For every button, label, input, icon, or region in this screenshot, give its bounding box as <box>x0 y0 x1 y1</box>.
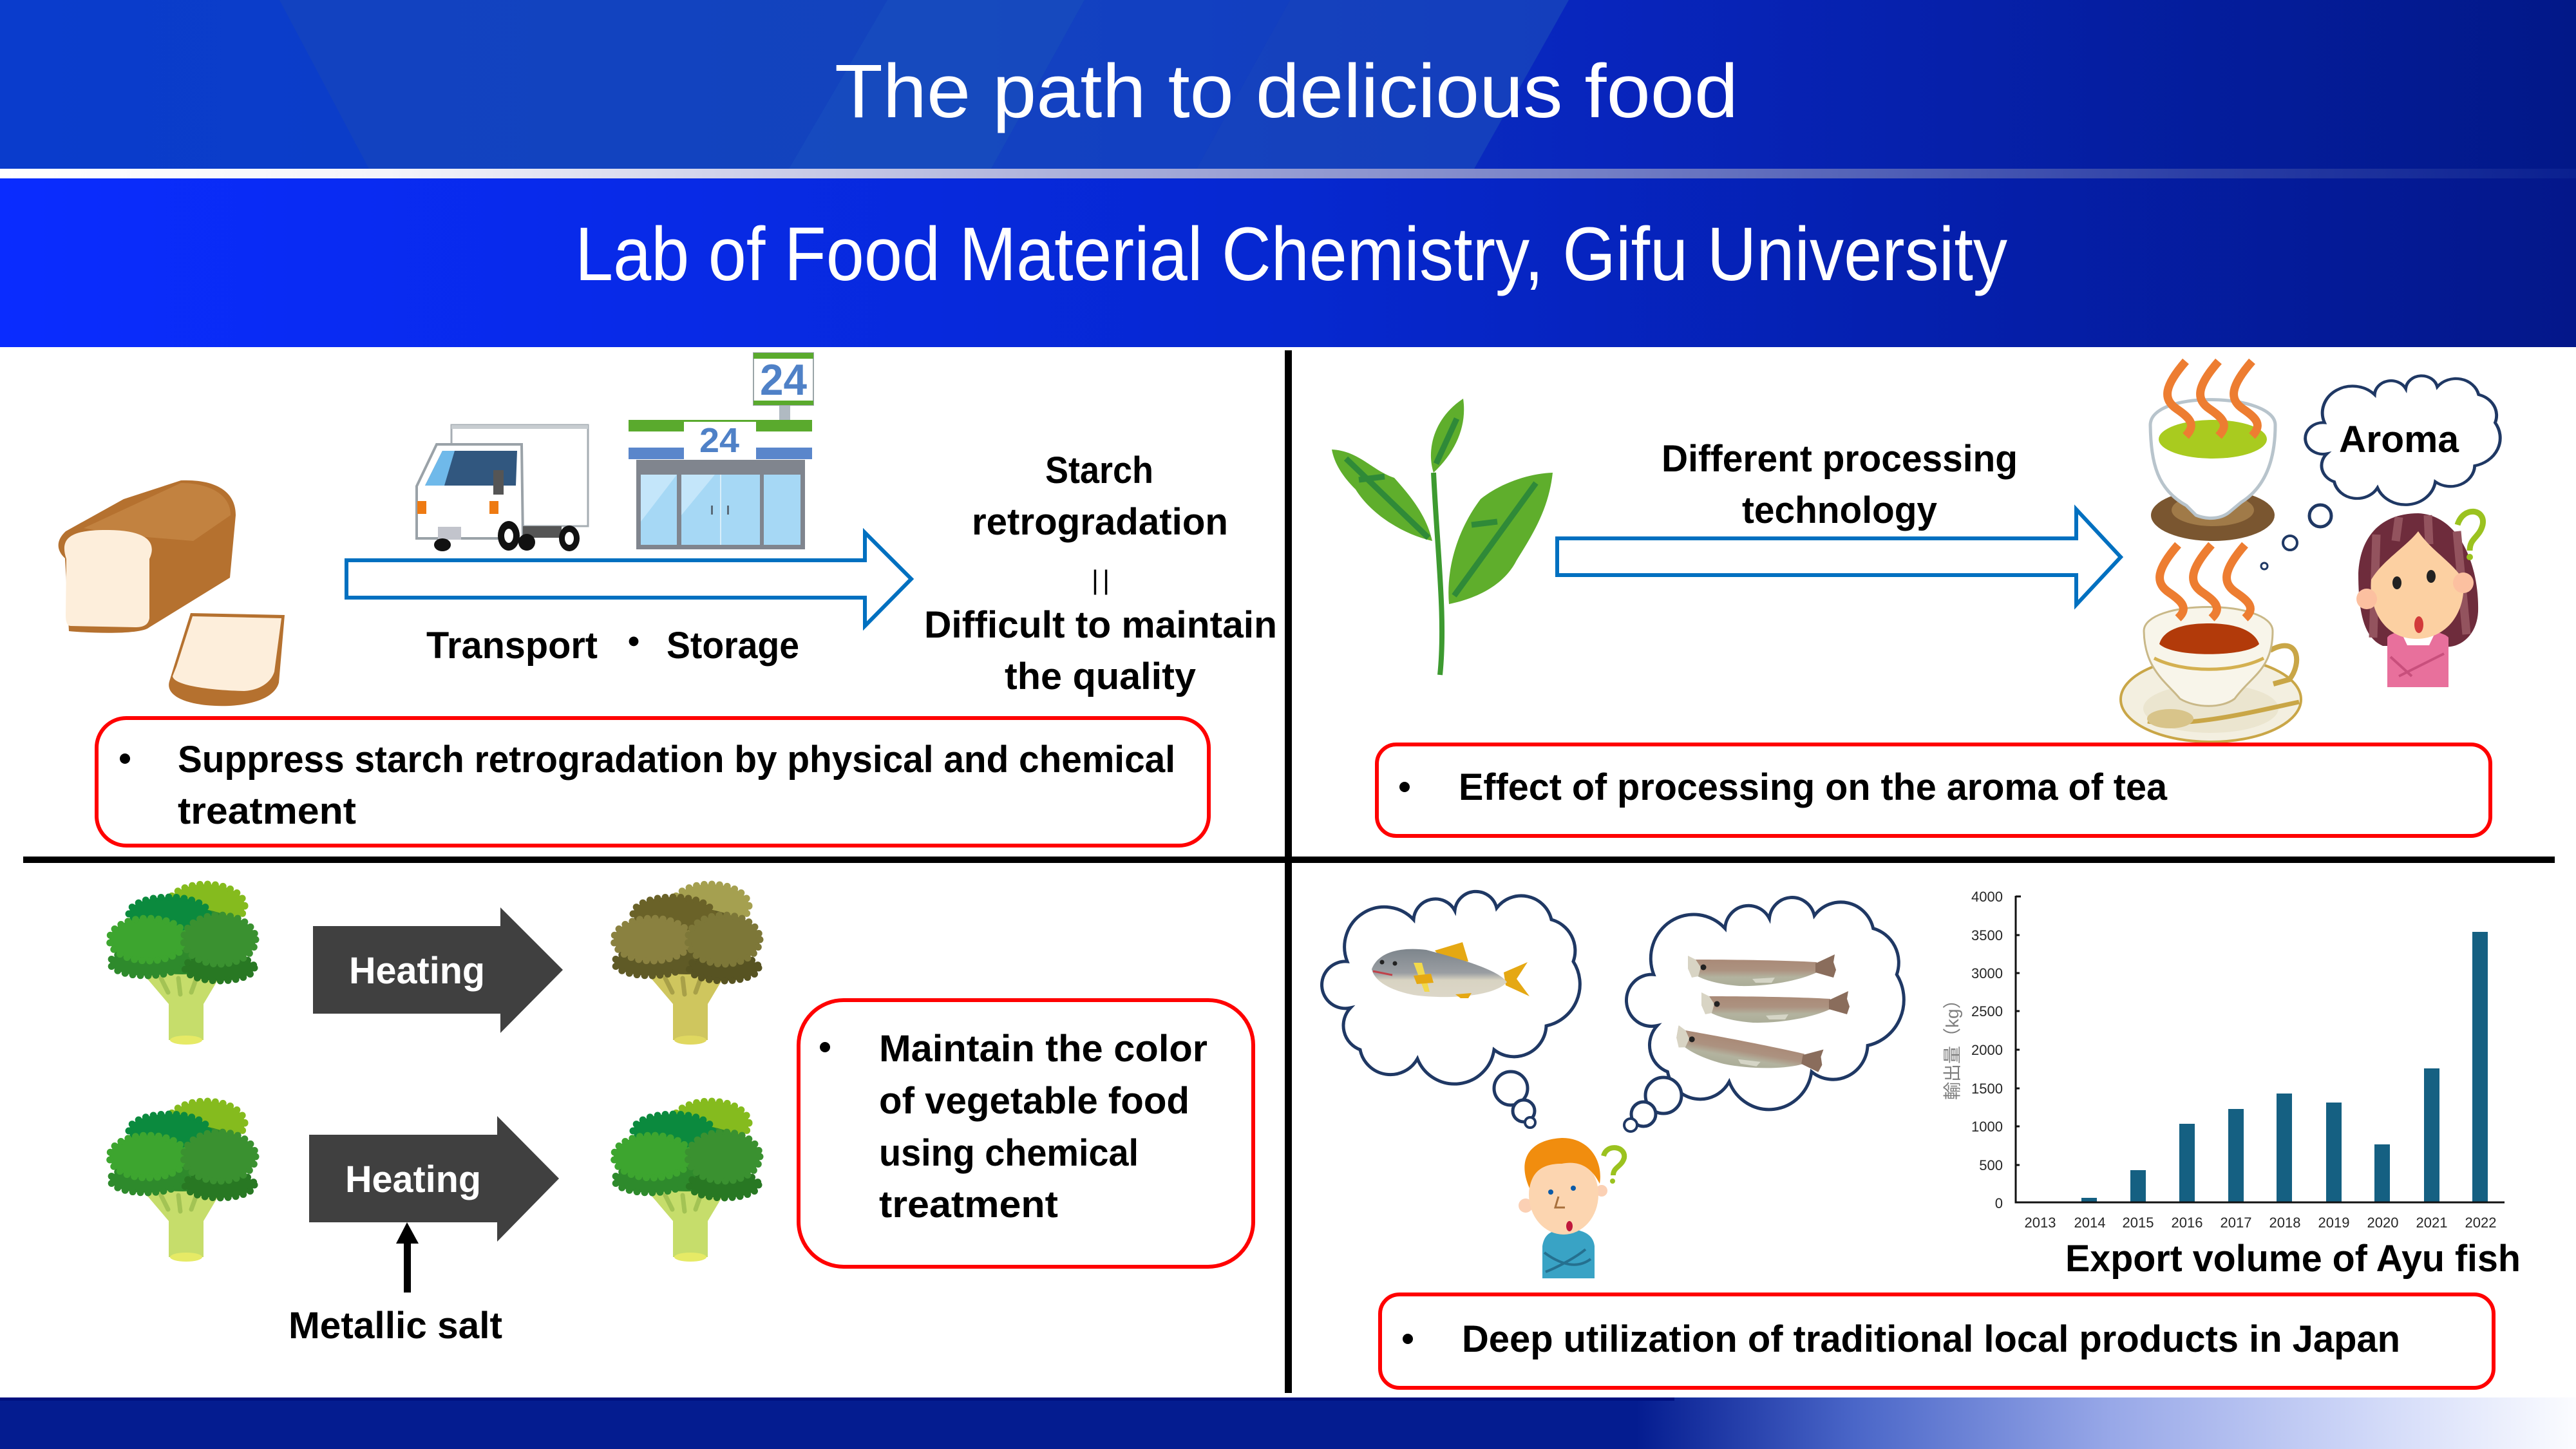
label: transport and storage: Storage <box>667 625 799 667</box>
x axis year labels: 2017 <box>2221 1215 2251 1231</box>
icon: tea leaves <box>1332 399 1553 675</box>
thought cloud: aroma: Aroma <box>2339 419 2459 460</box>
label: metallic salt: Metallic salt <box>289 1305 502 1347</box>
x axis year labels <box>2025 1215 2496 1231</box>
callout: suppress retrogradation <box>97 718 1209 846</box>
thought cloud: live ayu <box>1322 891 1580 1128</box>
x axis year labels: 2015 <box>2123 1215 2154 1231</box>
callout: maintain color <box>799 1000 1253 1267</box>
text: starch retrogradation consequence: Difficult to maintain <box>924 604 1277 646</box>
arrow: processing <box>1557 509 2121 605</box>
label: transport and storage: ・ <box>615 622 652 664</box>
icon: fresh broccoli top left <box>109 884 256 1045</box>
arrow: heating with metallic salt <box>309 1116 559 1242</box>
y axis tick labels: 0 <box>1995 1195 2003 1211</box>
text: starch retrogradation consequence: Starch <box>1045 450 1153 491</box>
thought cloud: aroma <box>2261 376 2500 569</box>
arrow: heating with metallic salt: Heating <box>345 1159 481 1200</box>
text: starch retrogradation consequence <box>924 450 1277 697</box>
label: different processing technology: Different processing <box>1662 438 2018 480</box>
x axis year labels: 2014 <box>2074 1215 2105 1231</box>
x axis year labels: 2016 <box>2172 1215 2202 1231</box>
label: transport and storage <box>426 622 799 667</box>
arrow: transport and storage <box>346 533 911 626</box>
y axis title: 輸出量（kg） <box>1942 990 1962 1100</box>
icon: bread loaf <box>59 480 236 633</box>
bars <box>2081 932 2488 1202</box>
y axis tick labels: 3000 <box>1971 965 2003 981</box>
title: The path to delicious food <box>835 49 1738 134</box>
y axis tick labels: 3500 <box>1971 927 2003 943</box>
icon: fresh broccoli bottom left <box>109 1101 256 1262</box>
panel: tea aroma <box>1332 361 2500 836</box>
label: different processing technology: technology <box>1742 489 1937 531</box>
footer band <box>0 1397 2576 1449</box>
label: different processing technology <box>1662 438 2018 531</box>
icon: browned broccoli <box>614 884 760 1045</box>
axes <box>2016 896 2505 1202</box>
icon: steam over green tea <box>2168 361 2257 436</box>
label: transport and storage: Transport <box>426 625 598 667</box>
panel: vegetable color <box>109 884 1253 1347</box>
white gradient stripe <box>0 169 2576 179</box>
arrow: metallic salt input <box>396 1222 419 1293</box>
icon: thinking girl <box>2356 511 2483 687</box>
thought cloud: grilled ayu <box>1624 898 1904 1132</box>
vertical divider <box>1285 350 1292 1393</box>
callout: effect of processing <box>1377 744 2490 836</box>
icon: green tea cup on coaster <box>2150 400 2275 541</box>
y axis tick labels <box>1971 889 2003 1211</box>
callout: effect of processing: Effect of processing on the aroma of tea <box>1459 766 2168 808</box>
panel: ayu fish <box>1322 889 2521 1388</box>
icon: bread slice <box>169 613 285 706</box>
icon: delivery truck <box>417 425 588 551</box>
icon: three grilled ayu <box>1673 954 1850 1081</box>
callout: suppress retrogradation: treatment <box>178 790 356 832</box>
x axis year labels: 2018 <box>2269 1215 2300 1231</box>
icon: convenience store: 24 <box>699 421 739 460</box>
icon: steam over black tea <box>2160 545 2250 618</box>
text: starch retrogradation consequence: the quality <box>1005 656 1196 697</box>
arrow: heating <box>313 907 563 1033</box>
text: starch retrogradation consequence: retrogradation <box>972 501 1228 543</box>
callout: maintain color: using chemical <box>879 1132 1139 1174</box>
y axis tick labels: 1000 <box>1971 1119 2003 1135</box>
subtitle band background <box>0 178 2576 347</box>
subtitle: Lab of Food Material Chemistry, Gifu University <box>575 212 2007 297</box>
callout: suppress retrogradation: Suppress starch retrogradation by physical and chemical <box>178 739 1175 781</box>
y axis tick labels: 2000 <box>1971 1042 2003 1058</box>
bar chart: export volume of ayu fish <box>1942 889 2505 1231</box>
header band: title background <box>0 0 2576 170</box>
y axis tick labels: 1500 <box>1971 1081 2003 1097</box>
y axis tick labels: 2500 <box>1971 1003 2003 1019</box>
callout: maintain color: of vegetable food <box>879 1080 1189 1122</box>
chart caption: Export volume of Ayu fish <box>2065 1238 2521 1280</box>
callout: maintain color: treatment <box>879 1184 1058 1226</box>
callout: deep utilization: Deep utilization of traditional local products in Japan <box>1462 1318 2400 1360</box>
y axis tick labels: 4000 <box>1971 889 2003 905</box>
icon: thinking boy <box>1519 1138 1624 1278</box>
x axis year labels: 2021 <box>2416 1215 2447 1231</box>
panel: starch retrogradation <box>59 353 1277 846</box>
text: starch retrogradation consequence: || <box>1092 565 1110 595</box>
horizontal divider <box>23 857 2555 863</box>
icon: green broccoli after treatment <box>614 1101 760 1262</box>
callout: deep utilization <box>1380 1294 2494 1388</box>
x axis year labels: 2020 <box>2367 1215 2398 1231</box>
y axis tick labels: 500 <box>1979 1157 2003 1173</box>
icon: convenience store <box>629 353 813 549</box>
icon: live ayu fish <box>1372 942 1530 998</box>
x axis year labels: 2013 <box>2025 1215 2056 1231</box>
arrow: heating: Heating <box>349 950 485 992</box>
icon: black tea cup and saucer <box>2121 607 2301 742</box>
x axis year labels: 2022 <box>2465 1215 2496 1231</box>
icon: convenience store: 24 <box>760 355 807 404</box>
x axis year labels: 2019 <box>2318 1215 2349 1231</box>
callout: maintain color: Maintain the color <box>879 1028 1208 1070</box>
